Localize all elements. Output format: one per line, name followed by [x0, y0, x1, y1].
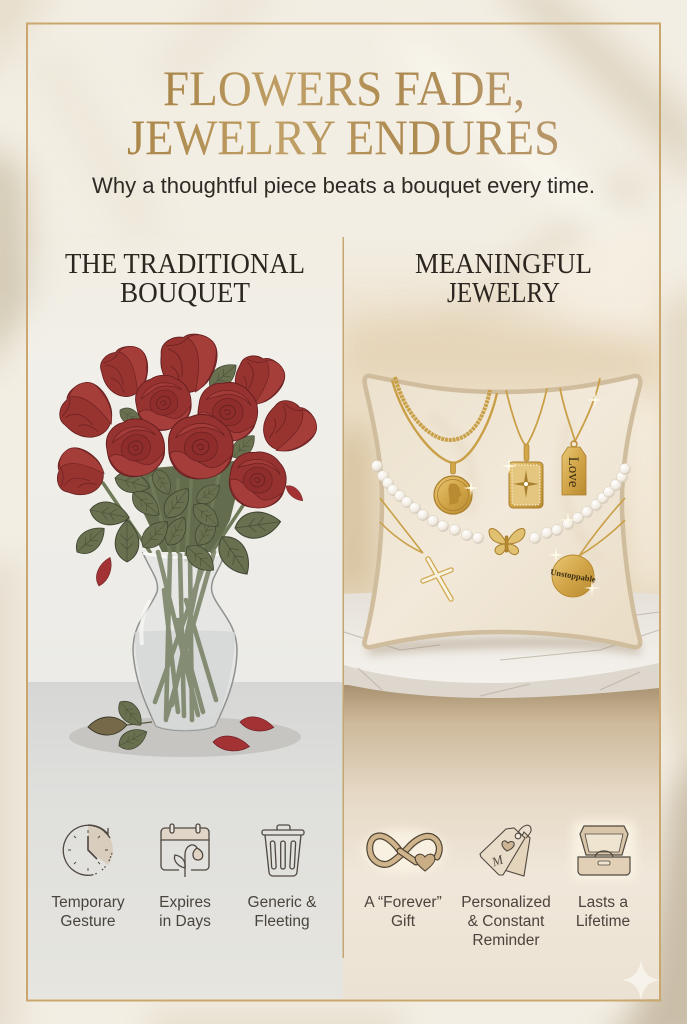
love tag necklace [560, 378, 600, 495]
label: personalized and constant reminder: Personalized [461, 894, 551, 911]
label: expires in days: Expires [159, 894, 211, 911]
label: personalized and constant reminder: Reminder [472, 932, 540, 949]
label: generic and fleeting: Generic & [248, 894, 317, 911]
label: expires in days: in Days [159, 913, 211, 930]
label: generic and fleeting: Fleeting [254, 913, 310, 930]
panel: meaningful jewelry background [343, 275, 659, 999]
stems above the vase [103, 470, 250, 560]
icon: calendar with wilting flower [161, 824, 209, 877]
heading: the traditional bouquet: THE TRADITIONAL [65, 249, 305, 280]
label: a forever gift: A “Forever” [364, 894, 442, 911]
label: a forever gift: Gift [391, 913, 416, 930]
leaves [70, 358, 282, 562]
label: temporary gesture: Gesture [60, 913, 116, 930]
icon: trash can [262, 825, 304, 876]
stems in the vase [155, 552, 216, 720]
cross necklace [380, 498, 451, 599]
sparkles [463, 392, 603, 596]
unstoppable medal necklace: Unstoppable [550, 567, 597, 584]
illustration: roses in a glass vase [50, 332, 324, 757]
panel: traditional bouquet background [28, 230, 344, 999]
leaves at the vase rim [180, 530, 258, 581]
divider between columns [342, 237, 344, 958]
table shadow [69, 717, 301, 757]
title [127, 60, 560, 165]
heading: meaningful jewelry: MEANINGFUL [415, 249, 592, 280]
label: personalized and constant reminder: & Constant [468, 913, 545, 930]
decorative sparkle mark [622, 960, 660, 1000]
heading: the traditional bouquet: BOUQUET [120, 278, 250, 309]
dark foliage mass [130, 460, 245, 552]
fallen leaves and petals on the table [88, 696, 275, 754]
heading: the traditional bouquet [65, 249, 305, 309]
icon: engraved gift tags: M [489, 851, 506, 870]
icon: clock running out [63, 825, 113, 875]
coin pendant [434, 462, 472, 514]
glass vase [133, 553, 237, 730]
subtitle: Why a thoughtful piece beats a bouquet every time. [92, 173, 595, 198]
pillow [364, 376, 640, 650]
label: temporary gesture: Temporary [51, 894, 125, 911]
title: FLOWERS FADE, [163, 60, 525, 116]
curb chain necklaces [392, 377, 497, 463]
icon: open ring box [572, 820, 636, 880]
illustration: velvet pillow with jewelry [364, 376, 640, 650]
butterfly charm [489, 529, 525, 555]
rose heads [50, 332, 324, 513]
label: lasts a lifetime: Lifetime [576, 913, 630, 930]
icon: engraved gift tags [480, 825, 531, 876]
heading: meaningful jewelry: JEWELRY [447, 278, 560, 309]
love tag necklace: Love [565, 457, 581, 488]
falling petals [93, 483, 306, 588]
star pendant necklace [506, 388, 547, 508]
illustration: marble shelf [344, 591, 659, 698]
heading: meaningful jewelry [415, 249, 592, 309]
pearl necklace [371, 460, 631, 544]
title: JEWELRY ENDURES [127, 109, 560, 165]
icon: infinity with heart [362, 829, 446, 873]
unstoppable medal necklace [550, 498, 625, 597]
label: lasts a lifetime: Lasts a [578, 894, 628, 911]
